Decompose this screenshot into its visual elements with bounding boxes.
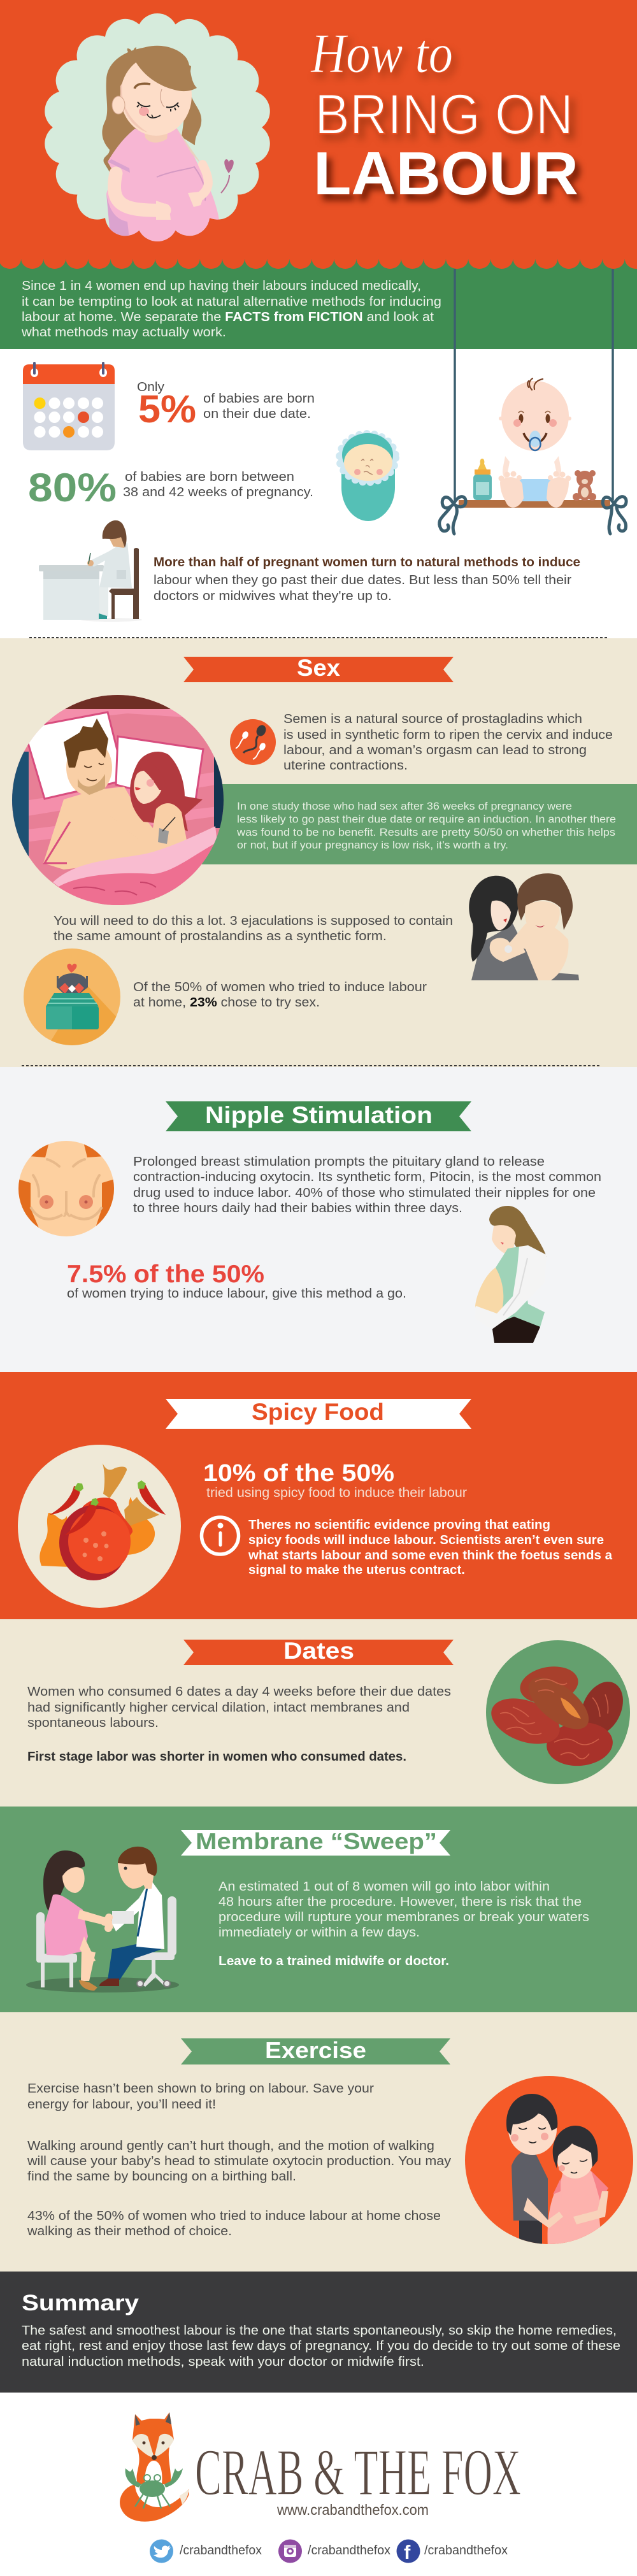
text: more than half: More than half of pregnant women turn to natural methods to induce: [154, 555, 580, 569]
text: study: or not, but if your pregnancy is low risk, it’s worth a try.: [237, 839, 508, 851]
text: prolonged: to three hours daily had their babies within three days.: [133, 1201, 462, 1215]
text: exercise: will cause your baby’s head to stimulate oxytocin production. You may: [27, 2154, 452, 2168]
icon: baby on swing: [440, 378, 626, 534]
calendar icon: [23, 363, 115, 450]
text: membrane: 48 hours after the procedure. However, there is risk that the: [218, 1894, 582, 1909]
text: dates: [27, 1684, 451, 1764]
crab: [125, 2468, 183, 2508]
facebook handle: /crabandthefox: [424, 2543, 508, 2558]
panel: nipple stimulation: [0, 1067, 637, 1372]
stat: 7.5 percent: of women trying to induce labour, give this method a go.: [67, 1286, 406, 1301]
icon: twitter: [150, 2539, 173, 2563]
panel: spicy food: [0, 1372, 637, 1619]
text: semen: labour, and a woman’s orgasm can lead to strong: [283, 743, 587, 757]
stat: 7.5 percent: 7.5% of the 50%: [67, 1261, 264, 1288]
text: study: less likely to go past their due date or require an induction. In another there: [237, 813, 616, 826]
text: exercise: energy for labour, you’ll need it!: [27, 2097, 216, 2112]
text: ejaculations: [54, 913, 453, 943]
text: semen: uterine contractions.: [283, 758, 408, 773]
green study band: [191, 784, 637, 864]
neck and face: [145, 134, 168, 143]
text: membrane: [218, 1879, 589, 1968]
woman: [130, 752, 203, 831]
banner: exercise: Exercise: [265, 2037, 366, 2063]
intro text: what methods may actually work.: [21, 325, 226, 340]
back hair: [102, 47, 201, 172]
panel: membrane sweep: [0, 1807, 637, 2012]
text: dates: First stage labor was shorter in women who consumed dates.: [27, 1749, 406, 1764]
text: prolonged: Prolonged breast stimulation prompts the pituitary gland to release: [133, 1154, 545, 1169]
banner: sex: [183, 655, 454, 682]
stat: 5 percent: 5%: [138, 387, 196, 431]
banner: nipple stimulation: [166, 1101, 471, 1131]
text: study: [236, 800, 616, 851]
text: no scientific evidence: [248, 1517, 613, 1577]
stat: 10 percent: [203, 1460, 467, 1500]
icon: bed badge: [24, 948, 120, 1045]
stat: 5 percent: on their due date.: [203, 406, 311, 421]
baby body: [503, 456, 561, 479]
teddy bear: [573, 470, 596, 501]
logo: fox and crab: [120, 2412, 189, 2522]
patient chair: [36, 1912, 77, 1987]
twitter handle: /crabandthefox: [180, 2543, 262, 2558]
summary text: eat right, rest and enjoy those last few days of pregnancy. If you do decide to try out some of these: [22, 2338, 620, 2353]
banner: membrane sweep: Membrane “Sweep”: [196, 1828, 437, 1854]
title: [310, 23, 578, 208]
text: membrane: Leave to a trained midwife or doctor.: [218, 1954, 449, 1968]
text: ejaculations: You will need to do this a lot. 3 ejaculations is supposed to contain: [54, 913, 453, 928]
website: www.crabandthefox.com: [276, 2501, 429, 2518]
facial features: [134, 83, 150, 89]
text: of the 50 percent: at home, 23% chose to try sex.: [133, 995, 320, 1010]
stat: 80 percent: of babies are born between: [125, 469, 294, 484]
summary text: natural induction methods, speak with your doctor or midwife first.: [22, 2354, 424, 2369]
heart flower: [221, 159, 234, 193]
intro text: [21, 278, 441, 340]
stat: 10 percent: tried using spicy food to induce their labour: [206, 1485, 467, 1500]
title: LABOUR: [313, 140, 578, 208]
text: prolonged: contraction-inducing oxytocin. Its synthetic form, Pitocin, is the most common: [133, 1170, 601, 1184]
text: ejaculations: the same amount of prostalandins as a synthetic form.: [54, 929, 387, 943]
text: semen: Semen is a natural source of prostagladins which: [283, 712, 582, 726]
panel: exercise: [0, 2012, 637, 2272]
icon: swaddled baby: [338, 433, 397, 521]
text: exercise: [27, 2081, 452, 2238]
banner: spicy food: [166, 1399, 471, 1429]
text: dates: spontaneous labours.: [27, 1715, 159, 1730]
doctor: [108, 1944, 162, 1980]
arms: [114, 173, 164, 210]
text: more than half: doctors or midwives what they're up to.: [154, 589, 392, 603]
banner: dates: [183, 1638, 454, 1665]
instagram handle: /crabandthefox: [308, 2543, 391, 2558]
blankets: [55, 838, 217, 905]
text: membrane: procedure will rupture your membranes or break your waters: [218, 1910, 589, 1924]
illustration: pregnant woman side view: [475, 1206, 547, 1343]
text: no scientific evidence: signal to make the uterus contract.: [248, 1563, 465, 1577]
text: dates: Women who consumed 6 dates a day 4 weeks before their due dates: [27, 1684, 451, 1699]
text: dates: had significantly higher cervical dilation, intact membranes and: [27, 1700, 410, 1715]
swing ropes: [455, 269, 613, 500]
illustration: embracing couple: [469, 873, 579, 980]
illustration: couple in bed: [12, 695, 224, 905]
baby head: [501, 381, 569, 451]
text: exercise: Walking around gently can’t hurt though, and the motion of walking: [27, 2138, 434, 2153]
text: exercise: find the same by bouncing on a birthing ball.: [27, 2169, 296, 2184]
icon: info: [201, 1517, 238, 1554]
summary heading: Summary: [22, 2291, 140, 2315]
intro text: Since 1 in 4 women end up having their labours induced medically,: [22, 278, 421, 293]
banner: sex: Sex: [297, 655, 340, 681]
text: study: was found to be no benefit. Results are pretty 50/50 on whether this helps: [236, 826, 615, 838]
scalloped badge with pregnant woman: [45, 13, 270, 241]
panel: dates: [0, 1619, 637, 1807]
panel: summary: [0, 2272, 637, 2393]
text: study: In one study those who had sex after 36 weeks of pregnancy were: [237, 800, 572, 812]
text: prolonged: drug used to induce labor. 40% of those who stimulated their nipples for one: [133, 1185, 596, 1200]
stat: 80 percent: 38 and 42 weeks of pregnancy.: [123, 485, 313, 499]
text: membrane: immediately or within a few days.: [218, 1925, 420, 1940]
patient: [81, 1949, 96, 1981]
stat: 10 percent: 10% of the 50%: [203, 1460, 394, 1487]
banner: exercise: [181, 2037, 450, 2064]
title: BRING ON: [315, 82, 573, 146]
stat: 5 percent: [137, 380, 315, 431]
text: semen: [283, 712, 613, 773]
text: semen: is used in synthetic form to ripen the cervix and induce: [283, 727, 613, 742]
panel: intro green band: [0, 258, 637, 349]
text: of the 50 percent: [133, 980, 427, 1010]
bottle: [473, 459, 492, 500]
banner: dates: Dates: [283, 1638, 354, 1664]
swing seat and bows: [440, 497, 626, 534]
panel: header: [0, 0, 637, 269]
illustration: spicy chicken: [18, 1445, 181, 1608]
text: no scientific evidence: Theres no scientific evidence proving that eating: [248, 1517, 550, 1532]
text: no scientific evidence: spicy foods will induce labour. Scientists aren’t even sure: [248, 1533, 604, 1547]
stat: 7.5 percent: [67, 1261, 406, 1301]
intro text: it can be tempting to look at natural alternative methods for inducing: [22, 294, 441, 309]
intro text: labour at home. We separate the FACTS from FICTION and look at: [22, 310, 434, 324]
text: more than half: labour when they go past their due dates. But less than 50% tell their: [154, 573, 571, 587]
text: exercise: Exercise hasn’t been shown to bring on labour. Save your: [27, 2081, 374, 2096]
icon: instagram: [278, 2539, 302, 2563]
icon: facebook: [396, 2539, 420, 2563]
stat: 80 percent: [28, 466, 313, 510]
icon: breasts: [16, 1141, 117, 1237]
icon: facebook: f: [404, 2541, 411, 2563]
text: of the 50 percent: Of the 50% of women who tried to induce labour: [133, 980, 427, 994]
man: [43, 787, 153, 869]
stat: 5 percent: of babies are born: [203, 391, 315, 406]
text: prolonged: [133, 1154, 601, 1215]
illustration: midwife and patient: [26, 1847, 179, 1993]
icon: doctor writing at desk: [39, 520, 142, 622]
text: more than half: [154, 555, 580, 603]
summary text: [22, 2323, 620, 2369]
dress: [106, 125, 219, 250]
text: exercise: walking as their method of choice.: [27, 2224, 232, 2238]
doctor chair: [134, 1896, 176, 1987]
social links: [150, 2539, 508, 2563]
text: exercise: 43% of the 50% of women who tried to induce labour at home chose: [27, 2208, 441, 2223]
illustration: dates: [485, 1640, 631, 1784]
icon: sperm: [230, 719, 276, 765]
illustration: expecting couple: [465, 2076, 633, 2249]
stat: 80 percent: 80%: [28, 466, 117, 510]
banner: spicy food: Spicy Food: [252, 1399, 384, 1425]
fringe: [134, 46, 197, 91]
summary text: The safest and smoothest labour is the one that starts spontaneously, so skip the home remedies,: [22, 2323, 617, 2338]
panel: sex: [0, 638, 637, 1067]
stat: 5 percent: Only: [137, 380, 165, 394]
text: no scientific evidence: what starts labour and some even think the foetus sends a: [248, 1548, 613, 1563]
text: membrane: An estimated 1 out of 8 women will go into labor within: [218, 1879, 550, 1894]
banner: nipple stimulation: Nipple Stimulation: [205, 1102, 433, 1128]
title: How to: [310, 23, 453, 85]
